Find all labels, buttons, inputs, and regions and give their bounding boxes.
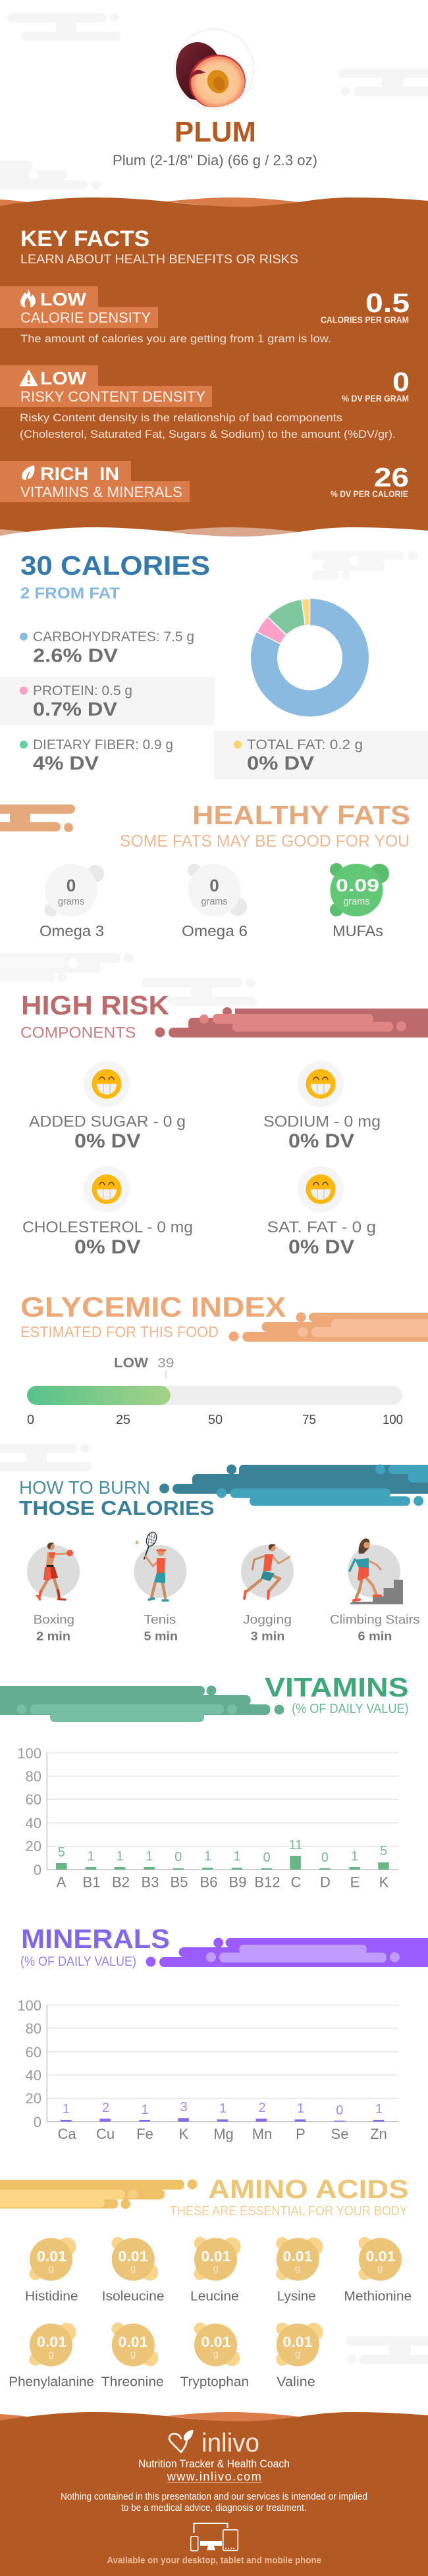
item: saturated fat — [267, 1167, 376, 1258]
item: added sugar: 0% DV — [74, 1130, 141, 1152]
item: saturated fat: 0% DV — [288, 1236, 354, 1258]
y axis labels: 0 — [34, 2114, 41, 2130]
activity: jogging: 3 min — [251, 1629, 284, 1643]
icon: smile — [298, 1167, 344, 1213]
value labels: 5 — [380, 1844, 387, 1858]
subheading: (% OF DAILY VALUE) — [292, 1702, 409, 1716]
banner: high risk — [155, 1007, 428, 1038]
amino: valine: g — [295, 2349, 300, 2359]
amino: tryptophan: g — [213, 2349, 219, 2359]
bars — [56, 1856, 389, 1870]
disclaimer — [61, 2492, 367, 2513]
panel: amino acids — [0, 2175, 412, 2390]
description — [20, 411, 396, 440]
category labels: B2 — [112, 1874, 130, 1891]
value labels: 1 — [141, 2103, 149, 2117]
background cloud: above burn — [0, 1444, 92, 1471]
activity: boxing: Boxing — [34, 1613, 74, 1627]
availability note: Available on your desktop, tablet and mobile phone — [107, 2554, 321, 2565]
subheading: LEARN ABOUT HEALTH BENEFITS OR RISKS — [20, 252, 298, 267]
background cloud: top left — [7, 13, 121, 41]
category labels — [57, 1874, 389, 1891]
bar chart: vitamins — [17, 1745, 398, 1891]
donut chart: macronutrients — [257, 598, 356, 703]
panel: calories — [0, 550, 428, 779]
label: low: LOW — [40, 289, 86, 309]
amino: histidine: 0.01 — [37, 2248, 67, 2265]
bar chart: minerals — [17, 1997, 398, 2142]
activity: climbing stairs: 6 min — [358, 1629, 392, 1643]
value labels: 1 — [63, 2102, 70, 2116]
amino: histidine: g — [48, 2263, 54, 2274]
subheading: (% OF DAILY VALUE) — [20, 1955, 136, 1969]
category labels: Ca — [57, 2126, 76, 2142]
background cloud: above high risk banner — [142, 978, 257, 1006]
heading: amino acids: AMINO ACIDS — [208, 2175, 409, 2204]
stat: omega 3: grams — [58, 897, 84, 907]
label: vitamins and minerals: VITAMINS & MINERALS — [20, 484, 182, 500]
gauge scale: 50 — [208, 1413, 223, 1427]
amino: threonine: Threonine — [101, 2375, 164, 2390]
panel: healthy fats — [0, 800, 410, 939]
stat: mufas — [330, 863, 389, 939]
item: sodium: 0% DV — [288, 1130, 354, 1152]
activity: climbing stairs — [330, 1538, 420, 1643]
amino: phenylalanine: g — [48, 2349, 54, 2359]
heading: healthy fats: HEALTHY FATS — [192, 800, 410, 830]
panel: vitamins — [0, 1672, 409, 1891]
amino: leucine: 0.01 — [201, 2248, 230, 2265]
legend: protein: 0.7% DV — [33, 699, 118, 720]
category labels: P — [296, 2126, 306, 2142]
subheading: THESE ARE ESSENTIAL FOR YOUR BODY — [170, 2204, 408, 2219]
legend: protein — [20, 683, 132, 720]
value labels: 2 — [102, 2101, 109, 2115]
item: added sugar — [29, 1061, 186, 1152]
activity: boxing — [27, 1542, 80, 1643]
icon: smile — [84, 1061, 130, 1107]
top wave — [0, 197, 428, 540]
title: PLUM: PLUM — [174, 116, 256, 148]
disclaimer: to be a medical advice, diagnosis or treatment. — [121, 2503, 307, 2513]
category labels: K — [179, 2126, 189, 2142]
banner: minerals — [146, 1938, 428, 1967]
amino: isoleucine: g — [130, 2263, 136, 2274]
panel: footer — [0, 2412, 428, 2576]
legend: dietary fiber — [20, 737, 173, 774]
background cloud: left of high risk — [0, 953, 133, 982]
activity: tennis — [134, 1531, 186, 1643]
bars — [61, 2118, 384, 2122]
legend: carbohydrates: CARBOHYDRATES: 7.5 g — [33, 629, 194, 644]
category labels: B3 — [142, 1874, 159, 1891]
stat: omega 3: 0 — [67, 876, 76, 895]
value: 0.5: 0.5 — [365, 288, 410, 318]
amino: lysine: g — [295, 2263, 300, 2274]
icon: stairs — [350, 1580, 403, 1604]
amino: phenylalanine: 0.01 — [37, 2334, 67, 2350]
amino: phenylalanine: Phenylalanine — [9, 2375, 94, 2390]
icon: devices — [191, 2523, 238, 2551]
item: saturated fat: SAT. FAT - 0 g — [267, 1219, 376, 1236]
amino: methionine: 0.01 — [366, 2248, 395, 2265]
y axis labels: 60 — [26, 2044, 41, 2061]
value labels: 1 — [116, 1849, 124, 1864]
row background: protein — [0, 677, 215, 725]
amino: leucine — [190, 2237, 241, 2304]
y axis labels: 0 — [34, 1862, 41, 1878]
amino: valine: Valine — [277, 2375, 315, 2390]
amino: methionine: g — [377, 2263, 383, 2274]
fact: risky content density — [0, 365, 410, 440]
y axis labels: 40 — [26, 1815, 41, 1831]
item: cholesterol: 0% DV — [74, 1236, 141, 1258]
value labels: 0 — [174, 1850, 182, 1864]
banner: glycemic index — [229, 1313, 428, 1342]
value labels: 1 — [375, 2102, 383, 2116]
amino: methionine — [344, 2237, 412, 2304]
category labels: Se — [331, 2126, 348, 2142]
category labels: Mg — [213, 2126, 234, 2142]
unit: % dv per calorie: % DV PER CALORIE — [331, 488, 408, 499]
amino: threonine: 0.01 — [119, 2334, 147, 2350]
amino: isoleucine: Isoleucine — [102, 2290, 165, 2304]
stat: mufas: MUFAs — [333, 922, 383, 939]
value labels: 0 — [336, 2103, 343, 2118]
category labels: Fe — [136, 2126, 153, 2142]
subheading: ESTIMATED FOR THIS FOOD — [20, 1323, 219, 1340]
subheading: 2 from fat: 2 FROM FAT — [20, 585, 120, 602]
value labels: 1 — [146, 1849, 153, 1864]
value labels: 1 — [87, 1849, 95, 1864]
banner: burn — [159, 1464, 428, 1506]
amino: isoleucine — [102, 2237, 165, 2304]
category labels: E — [350, 1874, 360, 1891]
stat: omega 6: 0 — [209, 876, 219, 895]
value labels — [58, 1838, 387, 1865]
category labels: B1 — [83, 1874, 100, 1891]
item: sodium: SODIUM - 0 mg — [263, 1113, 381, 1131]
y axis labels: 80 — [26, 1768, 41, 1785]
amino: valine: 0.01 — [283, 2334, 312, 2350]
y axis labels — [17, 1997, 41, 2130]
row background: total fat — [214, 731, 428, 779]
label: rich in: RICH IN — [40, 463, 119, 484]
fact: calorie density — [0, 286, 410, 345]
label: risky content density: RISKY CONTENT DENSITY — [20, 388, 205, 405]
heading: 30 calories: 30 CALORIES — [20, 550, 210, 581]
stat: omega 6: grams — [201, 897, 228, 907]
category labels: A — [57, 1874, 67, 1891]
category labels — [57, 2126, 387, 2142]
panel: high risk components — [20, 990, 428, 1258]
activity: jogging: Jogging — [243, 1613, 292, 1627]
category labels: B6 — [200, 1874, 217, 1891]
y axis labels: 80 — [26, 2020, 41, 2037]
marker: low 39 — [114, 1355, 174, 1378]
background cloud: top right — [339, 68, 428, 96]
activity: tennis: Tenis — [144, 1613, 176, 1627]
amino: threonine — [101, 2323, 164, 2390]
amino: lysine: Lysine — [277, 2290, 316, 2304]
activity: boxing: 2 min — [36, 1629, 70, 1643]
heading: high risk: HIGH RISK — [21, 990, 169, 1020]
amino: isoleucine: 0.01 — [119, 2248, 147, 2265]
value labels: 0 — [263, 1851, 271, 1865]
y axis labels: 20 — [26, 2090, 41, 2107]
amino: leucine: Leucine — [190, 2290, 239, 2304]
category labels: B5 — [171, 1874, 188, 1891]
heading: how to burn: HOW TO BURN — [19, 1477, 150, 1498]
label: calorie density: CALORIE DENSITY — [20, 309, 151, 326]
value: 0: 0 — [392, 367, 410, 397]
y axis labels: 20 — [26, 1838, 41, 1854]
amino: valine — [276, 2323, 323, 2390]
food image: plum — [174, 29, 254, 115]
heading: key facts: KEY FACTS — [20, 226, 149, 251]
category labels: Zn — [370, 2126, 387, 2142]
category labels: B12 — [254, 1874, 281, 1891]
value labels: 2 — [258, 2101, 266, 2115]
gauge scale: 100 — [383, 1413, 403, 1427]
legend: carbohydrates: 2.6% DV — [33, 645, 119, 666]
banner: healthy fats — [0, 804, 75, 832]
disclaimer: Nothing contained in this presentation and our services is intended or implied — [61, 2492, 367, 2502]
banner: amino acids — [0, 2179, 198, 2209]
category labels: D — [320, 1874, 331, 1891]
activity: climbing stairs: Climbing Stairs — [330, 1613, 420, 1627]
heading: those calories: THOSE CALORIES — [19, 1496, 215, 1519]
amino: lysine: 0.01 — [283, 2248, 312, 2265]
gauge scale — [27, 1413, 403, 1427]
heading: glycemic index: GLYCEMIC INDEX — [20, 1292, 286, 1323]
icon: inlivo heart logo — [169, 2430, 194, 2452]
brand name: inlivo — [201, 2429, 259, 2458]
bottom wave — [0, 527, 428, 554]
value labels — [63, 2100, 383, 2118]
gauge scale: 25 — [116, 1413, 130, 1427]
amino: threonine: g — [130, 2349, 136, 2359]
value: 26: 26 — [374, 462, 409, 492]
value labels: 5 — [58, 1845, 65, 1860]
legend: total fat: 0% DV — [247, 753, 315, 774]
amino: histidine — [25, 2238, 78, 2304]
amino: methionine: Methionine — [344, 2290, 412, 2304]
category labels: C — [291, 1874, 302, 1891]
tagline: Nutrition Tracker & Health Coach — [138, 2458, 290, 2470]
item: sodium — [263, 1061, 381, 1152]
y axis labels: 100 — [17, 1997, 41, 2014]
heading: vitamins: VITAMINS — [265, 1672, 409, 1702]
activity: tennis: 5 min — [144, 1629, 178, 1643]
icon: boxer — [37, 1542, 73, 1600]
stat: omega 6 — [182, 864, 248, 939]
legend: protein: PROTEIN: 0.5 g — [33, 683, 132, 698]
value labels: 1 — [233, 1849, 241, 1864]
marker: low 39: LOW — [114, 1355, 148, 1371]
amino: histidine: Histidine — [25, 2290, 78, 2304]
unit: % dv per gram: % DV PER GRAM — [342, 393, 409, 404]
stat: mufas: 0.09 — [336, 876, 379, 895]
unit: calories per gram: CALORIES PER GRAM — [321, 315, 409, 325]
y axis labels: 100 — [17, 1745, 41, 1762]
item: added sugar: ADDED SUGAR - 0 g — [29, 1113, 186, 1131]
marker: low 39: 39 — [157, 1356, 174, 1371]
icon: runner — [244, 1544, 290, 1598]
legend: carbohydrates — [20, 629, 194, 666]
y axis labels: 40 — [26, 2067, 41, 2084]
y axis labels: 60 — [26, 1791, 41, 1808]
icon: smile — [298, 1061, 344, 1107]
activity: jogging — [241, 1544, 294, 1643]
subheading: SOME FATS MAY BE GOOD FOR YOU — [120, 832, 410, 851]
legend: dietary fiber: DIETARY FIBER: 0.9 g — [33, 737, 173, 752]
icon: tennis player — [136, 1531, 168, 1600]
description: (Cholesterol, Saturated Fat, Sugars & Sodium) to the amount (%DV/gr). — [20, 428, 396, 440]
gauge scale: 75 — [302, 1413, 316, 1427]
value labels: 0 — [321, 1851, 329, 1865]
value labels: 11 — [289, 1838, 302, 1853]
gauge bar — [27, 1386, 402, 1405]
stat: omega 6: Omega 6 — [182, 922, 248, 939]
amino: tryptophan — [180, 2323, 249, 2390]
value labels: 1 — [219, 2101, 227, 2116]
icon: flame — [20, 290, 36, 307]
value labels: 1 — [297, 2101, 304, 2116]
item: cholesterol — [22, 1167, 193, 1258]
stat: omega 3: Omega 3 — [40, 922, 104, 939]
panel: how to burn those calories — [19, 1464, 428, 1643]
serving size: Plum (2-1/8" Dia) (66 g / 2.3 oz) — [113, 152, 317, 169]
icon: warning triangle — [20, 370, 38, 386]
category labels: B9 — [229, 1874, 246, 1891]
icon: leaf — [22, 465, 35, 480]
fact: rich in vitamins and minerals — [0, 461, 409, 502]
value labels: 3 — [180, 2100, 188, 2115]
banner: vitamins — [0, 1685, 284, 1722]
category labels: K — [379, 1874, 389, 1891]
amino: tryptophan: Tryptophan — [180, 2375, 249, 2390]
background cloud: lower left — [0, 161, 101, 190]
stat: omega 3 — [40, 864, 104, 939]
amino: phenylalanine — [9, 2323, 94, 2390]
legend: total fat — [234, 737, 363, 774]
panel: key facts — [0, 197, 428, 554]
item: cholesterol: CHOLESTEROL - 0 mg — [22, 1219, 193, 1236]
description: The amount of calories you are getting from 1 gram is low. — [20, 332, 331, 345]
legend: dietary fiber: 4% DV — [33, 753, 99, 774]
legend: total fat: TOTAL FAT: 0.2 g — [247, 737, 363, 752]
y axis labels — [17, 1745, 41, 1878]
label: low: LOW — [40, 368, 86, 388]
heading: minerals: MINERALS — [21, 1924, 170, 1954]
panel: minerals — [17, 1924, 428, 2142]
stat: mufas: grams — [343, 897, 370, 907]
icon: woman climbing — [350, 1538, 381, 1600]
description: Risky Content density is the relationship of bad components — [20, 411, 342, 424]
footer wave — [0, 2412, 428, 2576]
amino: lysine — [276, 2237, 323, 2304]
amino: leucine: g — [213, 2263, 219, 2274]
background cloud: right of valine — [345, 2336, 428, 2364]
subheading: components: COMPONENTS — [20, 1024, 136, 1041]
website link: www.inlivo.com — [167, 2470, 261, 2483]
amino: tryptophan: 0.01 — [201, 2334, 230, 2350]
background cloud: calories — [311, 550, 417, 580]
value labels: 1 — [204, 1849, 211, 1864]
gauge scale: 0 — [27, 1413, 34, 1427]
category labels: Mn — [252, 2126, 272, 2142]
category labels: Cu — [96, 2126, 115, 2142]
panel: glycemic index — [20, 1292, 428, 1427]
value labels: 1 — [351, 1849, 358, 1864]
icon: smile — [84, 1167, 130, 1213]
